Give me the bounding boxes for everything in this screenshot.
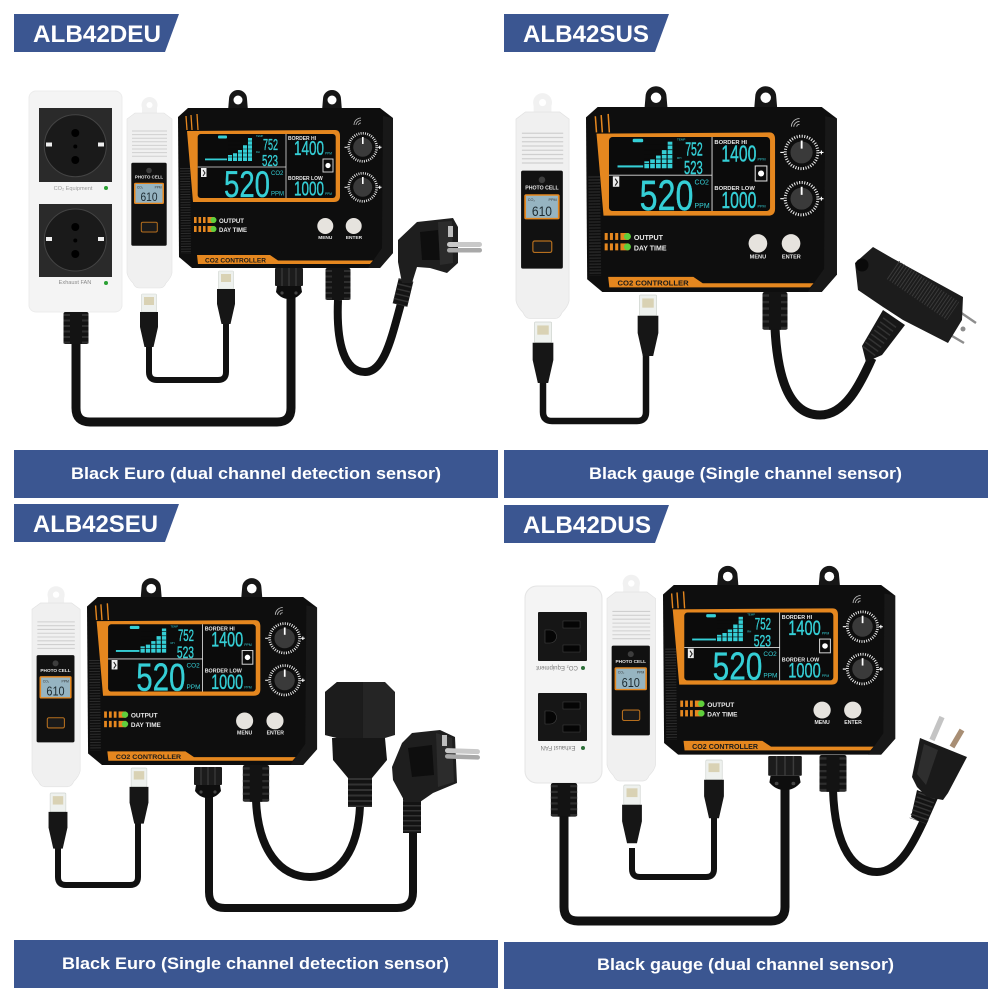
controller unit: TEMP xyxy=(256,134,263,138)
caption bar: Black Euro (dual channel detection sensor) xyxy=(71,464,441,483)
sensor patch cable xyxy=(58,822,138,885)
controller unit: 1400 xyxy=(788,616,821,640)
controller unit: 523 xyxy=(754,632,771,650)
controller unit: MENU xyxy=(318,235,333,241)
panel: ALB42DUS xyxy=(504,505,988,989)
controller unit: 1000 xyxy=(211,671,243,694)
controller unit: PPM xyxy=(325,192,332,196)
model tag ALB42DEU: ALB42DEU xyxy=(33,21,161,48)
controller unit: BORDER HI xyxy=(782,615,813,621)
schuko plug xyxy=(398,218,482,305)
controller unit: PPM xyxy=(822,631,829,635)
caption bar xyxy=(14,450,498,498)
controller unit xyxy=(178,90,393,268)
controller unit: ENTER xyxy=(346,235,363,241)
controller unit: BORDER HI xyxy=(714,140,747,146)
indicator led 1 xyxy=(581,666,585,670)
controller unit: 520 xyxy=(640,172,693,220)
controller unit: CO2 CONTROLLER xyxy=(205,258,266,264)
model tag ALB42SEU: ALB42SEU xyxy=(33,511,158,538)
controller unit: DAY TIME xyxy=(219,228,247,234)
strip strain relief xyxy=(551,783,577,817)
controller unit: CO2 CONTROLLER xyxy=(692,744,758,751)
photo cell sensor: CO₂ xyxy=(618,671,625,675)
long fan strip cable xyxy=(76,290,291,422)
controller unit: PPM xyxy=(763,673,777,680)
controller unit: BORDER HI xyxy=(288,136,317,142)
controller unit: 752 xyxy=(263,137,278,154)
photo cell sensor: PPM xyxy=(637,671,644,675)
photo cell sensor xyxy=(32,586,80,787)
controller unit: 1000 xyxy=(721,187,756,213)
controller unit xyxy=(87,578,317,765)
photo cell sensor: PHOTO CELL xyxy=(40,668,71,673)
controller unit: 520 xyxy=(713,645,762,688)
controller unit: PPM xyxy=(758,158,766,162)
RJ45 plug left xyxy=(533,322,553,383)
dual US power strip xyxy=(525,586,602,783)
socket 1 label: CO₂ Equipment xyxy=(54,186,93,192)
controller unit: TEMP xyxy=(170,624,178,628)
sensor patch cable xyxy=(632,815,714,877)
photo cell sensor xyxy=(516,93,569,318)
photo cell sensor: PPM xyxy=(549,198,557,202)
RJ45 plug right xyxy=(217,271,235,324)
strip strain relief xyxy=(64,312,88,344)
controller unit: OUTPUT xyxy=(634,235,664,242)
controller unit: OUTPUT xyxy=(219,219,244,225)
controller unit: BORDER HI xyxy=(205,627,235,633)
controller unit xyxy=(663,566,895,755)
US grounded plug xyxy=(911,717,967,825)
controller unit: RH xyxy=(747,630,751,634)
controller unit: CO2 xyxy=(187,662,200,669)
cable gland xyxy=(275,268,303,299)
controller unit: 523 xyxy=(684,157,703,178)
controller unit xyxy=(586,86,837,292)
outlet 2 label: Exhaust FAN xyxy=(540,744,576,750)
socket 1 xyxy=(39,108,112,182)
controller unit: PPM xyxy=(325,152,332,156)
photo cell sensor xyxy=(607,575,656,781)
controller unit: TEMP xyxy=(747,613,755,617)
controller unit: 752 xyxy=(178,626,194,645)
controller unit: RH xyxy=(256,150,260,154)
RJ45 plug right xyxy=(704,760,724,818)
controller unit: ENTER xyxy=(844,720,862,726)
RJ45 plug right xyxy=(130,768,148,824)
photo cell sensor: CO₂ xyxy=(43,679,50,683)
controller unit: ENTER xyxy=(267,731,284,737)
socket 2 xyxy=(39,204,112,277)
indicator led 1 xyxy=(104,186,108,190)
photo cell sensor: PHOTO CELL xyxy=(615,659,646,665)
panel: ALB42DEU xyxy=(14,14,498,498)
panel: ALB42SUS xyxy=(504,14,988,498)
euro extension socket xyxy=(325,682,395,807)
controller unit: 1400 xyxy=(294,138,324,160)
long fan strip cable xyxy=(564,788,785,921)
panel: ALB42SEU xyxy=(14,504,498,988)
caption bar: Black gauge (Single channel sensor) xyxy=(589,464,902,483)
controller unit: 1400 xyxy=(721,140,756,166)
controller unit: RH xyxy=(170,641,174,645)
cable gland xyxy=(194,767,222,798)
controller unit: BORDER LOW xyxy=(782,657,820,663)
controller unit: PPM xyxy=(758,205,766,209)
controller unit: 1000 xyxy=(788,659,821,683)
controller unit: MENU xyxy=(237,731,252,737)
model tag ALB42SEU xyxy=(14,504,179,542)
power cord xyxy=(338,300,402,372)
power strain relief xyxy=(820,755,846,792)
controller unit: PPM xyxy=(271,192,284,198)
model tag ALB42DUS xyxy=(504,505,669,543)
caption bar: Black Euro (Single channel detection sensor) xyxy=(62,954,449,973)
outlet 1 label: CO₂ Equipment xyxy=(536,664,578,670)
power cord xyxy=(833,790,925,872)
controller unit: CO2 xyxy=(271,171,284,177)
photo cell sensor: CO₂ xyxy=(528,198,535,202)
outlet 2 xyxy=(538,693,587,741)
controller unit: BORDER LOW xyxy=(288,176,323,182)
controller unit: RH xyxy=(677,156,681,160)
socket 2 label: Exhaust FAN xyxy=(59,280,91,286)
controller unit: CO2 CONTROLLER xyxy=(116,754,181,761)
caption bar xyxy=(14,940,498,988)
photo cell sensor: PPM xyxy=(155,186,162,190)
outlet 1 xyxy=(538,612,587,661)
controller unit: PPM xyxy=(244,643,252,647)
sensor patch cable xyxy=(543,355,646,421)
controller unit: 1400 xyxy=(211,629,243,651)
cable gland xyxy=(768,756,802,790)
controller unit: BORDER LOW xyxy=(714,186,755,192)
photo cell sensor xyxy=(127,97,172,288)
short socket cable xyxy=(256,800,360,877)
controller unit: BORDER LOW xyxy=(205,669,242,675)
RJ45 plug left xyxy=(622,785,642,843)
model tag ALB42DUS: ALB42DUS xyxy=(523,512,651,539)
controller unit: PPM xyxy=(822,674,829,678)
controller unit: 1000 xyxy=(294,178,324,200)
power strain relief xyxy=(243,765,269,802)
model tag ALB42SUS: ALB42SUS xyxy=(523,21,649,48)
controller unit: 752 xyxy=(755,615,771,633)
caption bar: Black gauge (dual channel sensor) xyxy=(597,955,894,974)
model tag ALB42SUS xyxy=(504,14,669,52)
controller unit: 520 xyxy=(136,656,185,699)
controller unit: PPM xyxy=(187,684,200,691)
schuko plug xyxy=(392,730,480,833)
indicator led 2 xyxy=(581,746,585,750)
power cord xyxy=(775,328,872,415)
indicator led 2 xyxy=(104,281,108,285)
photo cell sensor: PPM xyxy=(62,679,69,683)
photo cell sensor: PHOTO CELL xyxy=(135,175,163,180)
controller unit: CO2 CONTROLLER xyxy=(618,279,689,288)
controller unit: DAY TIME xyxy=(131,722,161,729)
US adapter plug xyxy=(855,247,976,362)
sensor patch cable xyxy=(149,322,226,380)
power strain relief xyxy=(326,268,350,300)
controller unit: DAY TIME xyxy=(707,711,738,718)
photo cell sensor: PHOTO CELL xyxy=(525,186,559,192)
dual euro power strip xyxy=(29,91,122,312)
long output cable xyxy=(209,793,413,908)
controller unit: OUTPUT xyxy=(707,702,734,709)
controller unit: CO2 xyxy=(763,651,777,658)
RJ45 plug right xyxy=(638,295,658,356)
controller unit: ENTER xyxy=(782,254,801,260)
model tag ALB42DEU xyxy=(14,14,179,52)
photo cell sensor: CO₂ xyxy=(137,186,144,190)
controller unit: CO2 xyxy=(695,179,709,186)
controller unit: MENU xyxy=(750,254,766,260)
controller unit: DAY TIME xyxy=(634,245,667,252)
controller unit: PPM xyxy=(244,685,252,689)
photo cell sensor: 610 xyxy=(532,204,552,220)
controller unit: MENU xyxy=(814,720,830,726)
caption bar xyxy=(504,450,988,498)
power strain relief xyxy=(762,292,788,330)
photo cell sensor: 610 xyxy=(46,684,65,698)
controller unit: TEMP xyxy=(677,138,685,142)
controller unit: 520 xyxy=(224,164,270,205)
RJ45 plug left xyxy=(49,793,67,849)
photo cell sensor: 610 xyxy=(140,190,158,204)
controller unit: 523 xyxy=(177,643,194,662)
controller unit: 523 xyxy=(262,153,278,170)
caption bar xyxy=(504,942,988,989)
controller unit: PPM xyxy=(695,203,710,210)
controller unit: 752 xyxy=(685,139,703,160)
RJ45 plug left xyxy=(140,294,158,347)
photo cell sensor: 610 xyxy=(622,675,640,690)
controller unit: OUTPUT xyxy=(131,713,158,720)
